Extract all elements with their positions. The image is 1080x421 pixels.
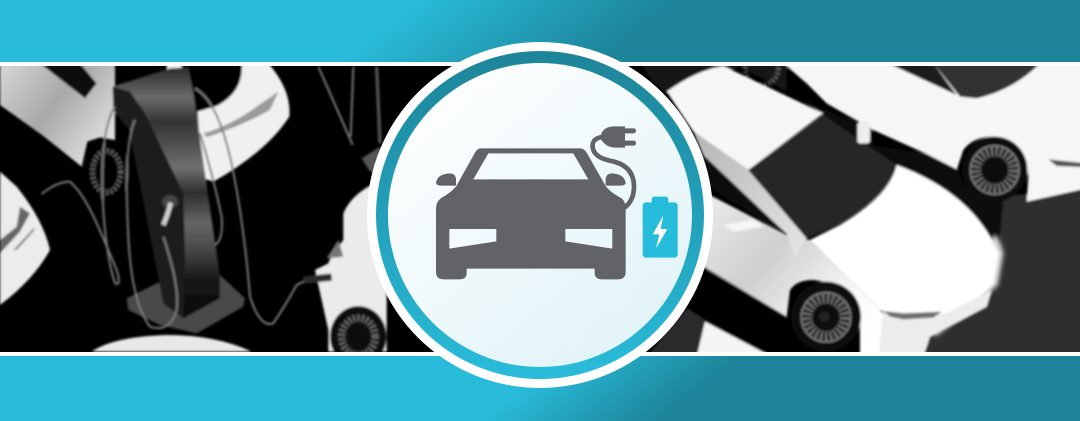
- charging cables: [42, 88, 310, 328]
- right part of photo: white cars: [640, 52, 1080, 357]
- icon: left mirror: [436, 173, 456, 186]
- car at bottom by circle: [650, 308, 768, 352]
- icon: electric car with plug and battery: [436, 126, 678, 279]
- charging station column: [113, 67, 220, 318]
- car being charged: [303, 178, 387, 367]
- car at bottom centre: [92, 335, 252, 352]
- icon: right mirror: [606, 173, 626, 186]
- photo: electric cars charging in black and white: [0, 52, 1080, 367]
- dark wheel at top: [640, 52, 787, 93]
- teal ring: [376, 51, 704, 379]
- car at left edge: [0, 172, 50, 305]
- glow around hood: [933, 237, 999, 333]
- charging station base: [127, 275, 245, 333]
- circular badge: [367, 42, 713, 388]
- icon: power cable: [593, 137, 634, 207]
- shadow between cars: [803, 100, 1003, 253]
- charger stand at top right of left part: [318, 67, 380, 173]
- concrete floor: [924, 188, 1080, 352]
- car at top left: [0, 63, 290, 201]
- bottom teal band: [0, 356, 1080, 421]
- icon: car front: [436, 148, 626, 279]
- icon: plug: [601, 126, 636, 148]
- white divider lines: [0, 62, 1080, 356]
- icon: battery: [643, 197, 678, 258]
- main white car: [650, 66, 998, 357]
- top teal band: [0, 0, 1080, 62]
- car at upper right: [783, 63, 1080, 202]
- pale disc: [388, 63, 692, 367]
- left part of photo: charger and cars: [0, 63, 387, 367]
